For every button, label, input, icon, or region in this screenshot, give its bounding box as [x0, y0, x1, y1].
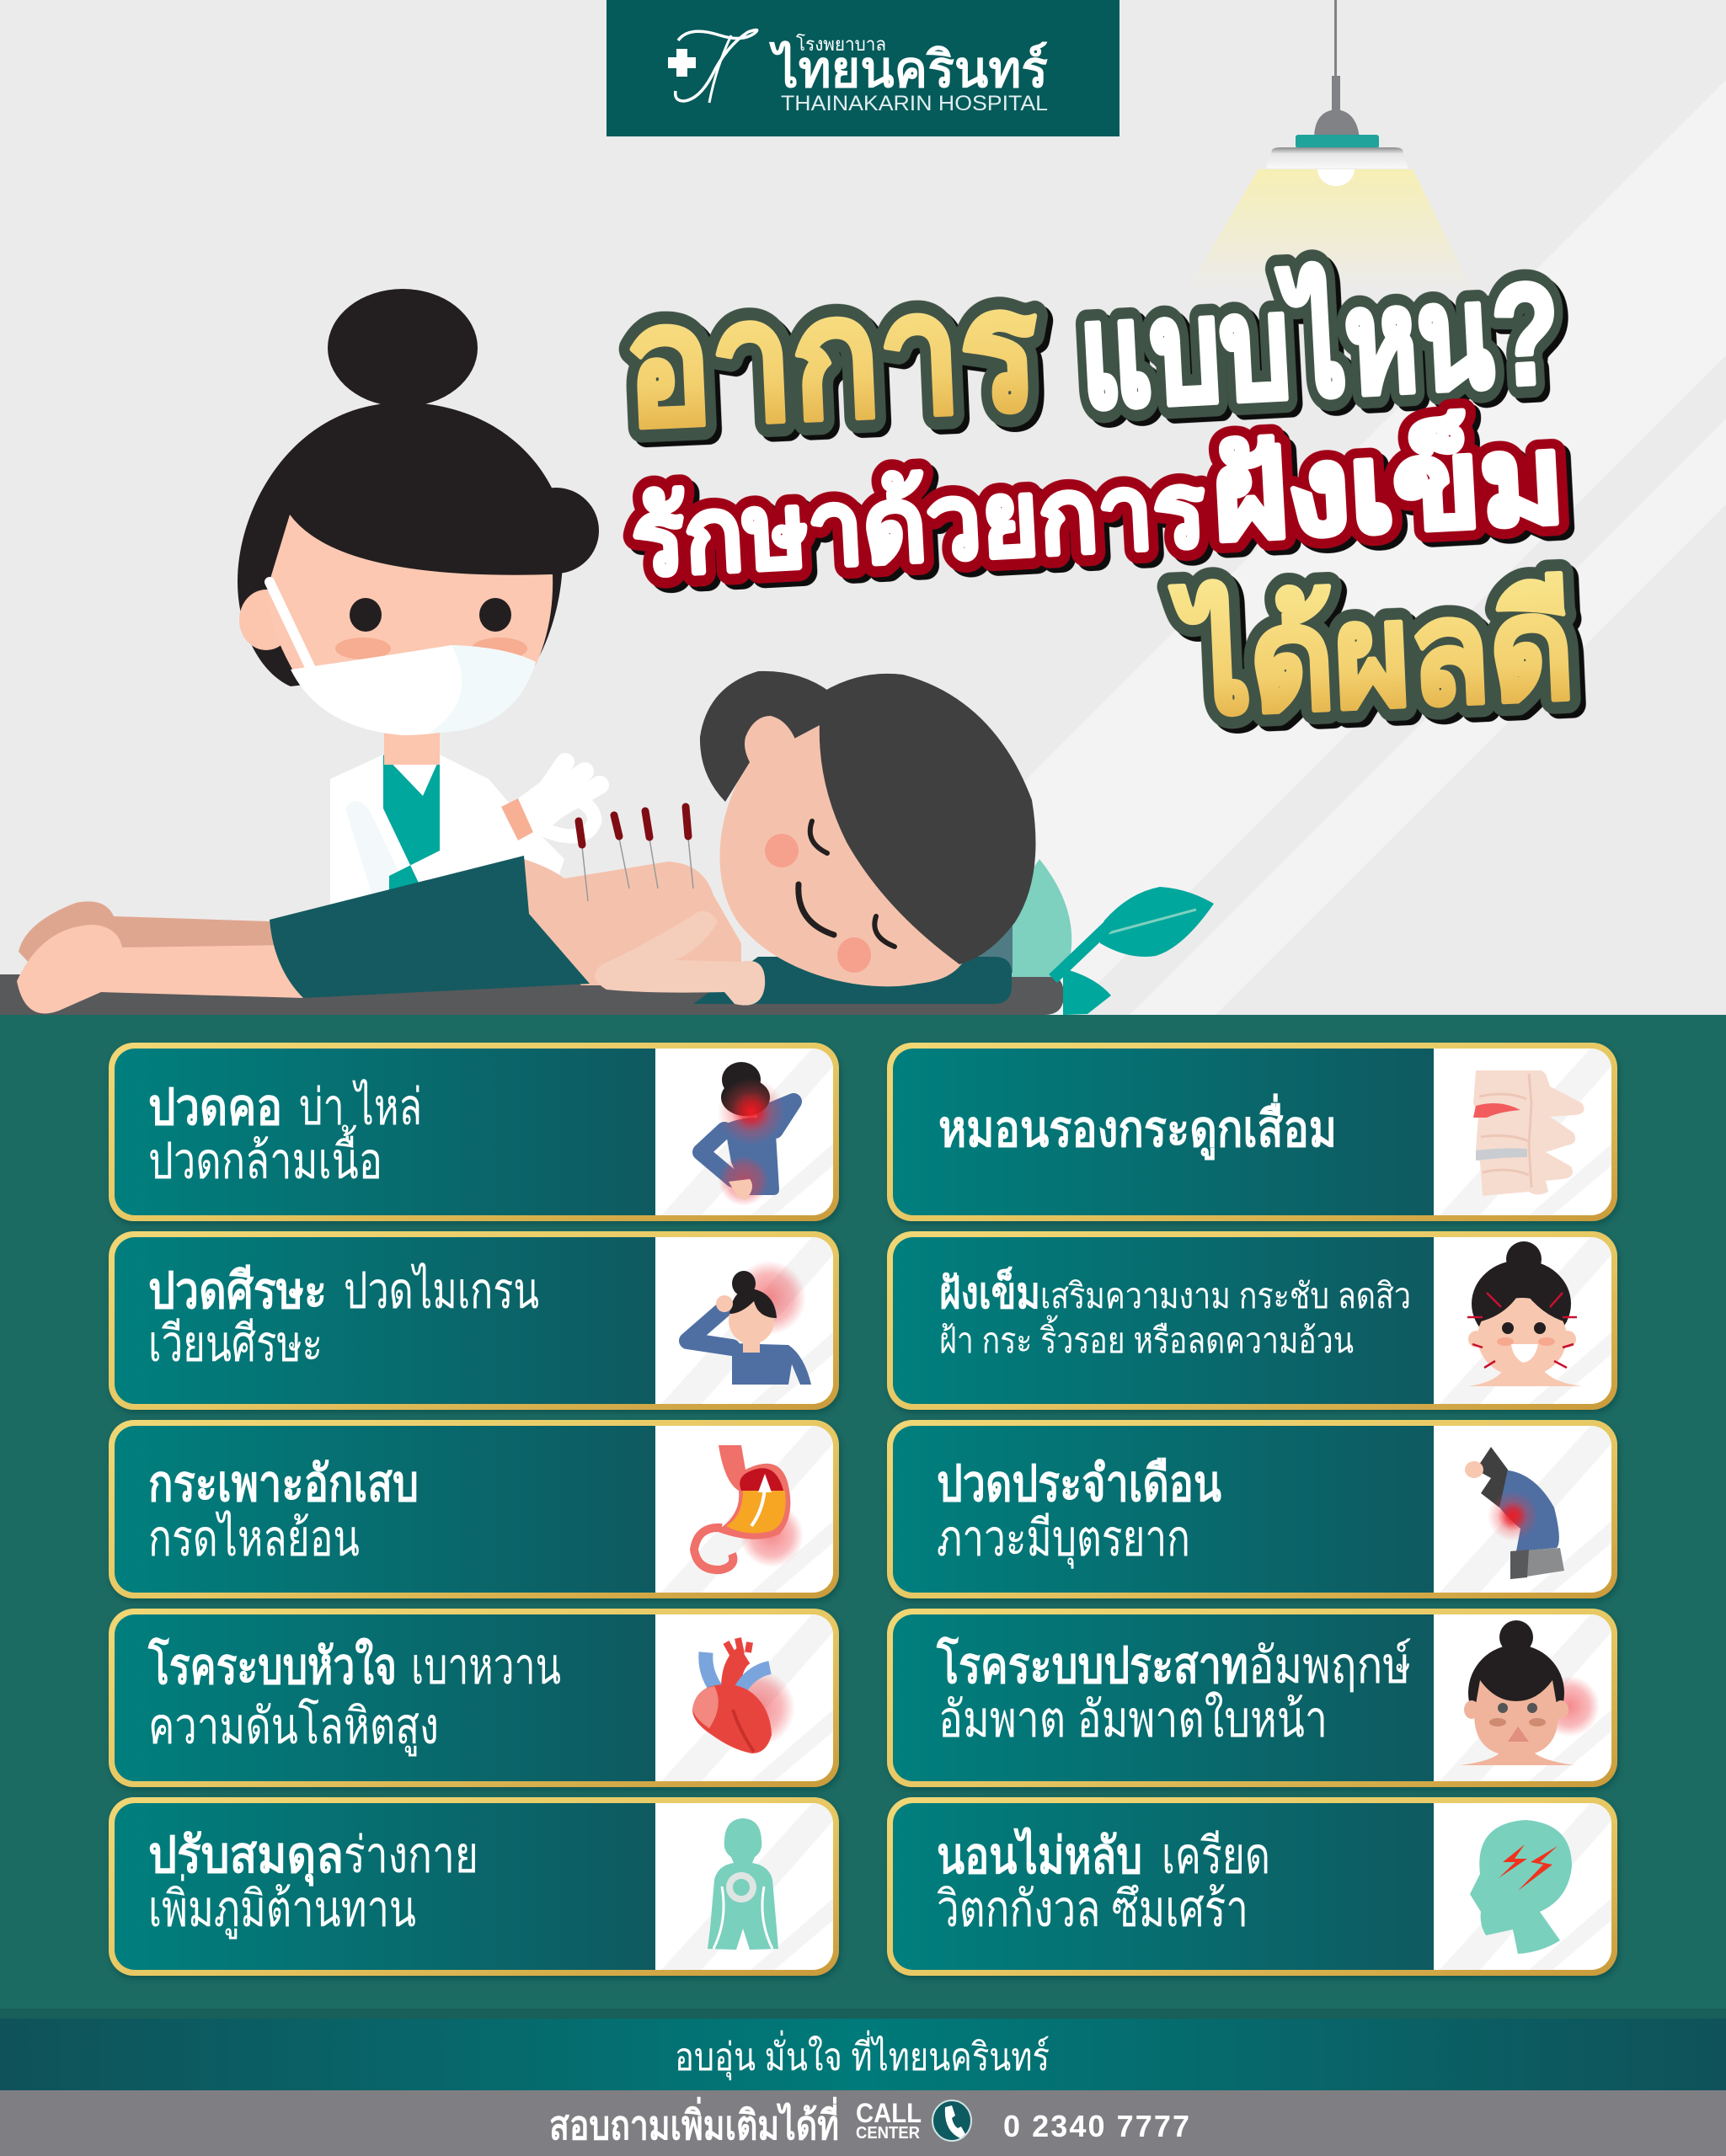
label second line: อัมพาต อัมพาตใบหน้า: [938, 1691, 1328, 1748]
label second line: เพิ่มภูมิต้านทาน: [148, 1874, 416, 1940]
card: heart disease: [109, 1609, 839, 1787]
icon: smiling face with needles: [1467, 1241, 1582, 1386]
card: menstrual pain: [887, 1420, 1617, 1598]
patient face: [720, 724, 965, 986]
nurse cheeks: [335, 638, 527, 659]
label bold: โรคระบบประสาท: [936, 1636, 1248, 1694]
title word: white which kind: แบบไหน?: [1076, 250, 1563, 438]
background wall: [0, 0, 1726, 1019]
nurse scrubs: [383, 755, 440, 914]
patient ear: [745, 716, 796, 775]
icon: phone: [932, 2100, 971, 2141]
label bold: ปรับสมดุล: [148, 1827, 344, 1886]
nurse hair: [238, 403, 563, 686]
logo big Thai name: ไทยนครินทร์: [768, 40, 1048, 98]
logo English name: THAINAKARIN HOSPITAL: [781, 92, 1048, 115]
card: herniated disc: [887, 1043, 1617, 1221]
label second line: ความดันโลหิตสูง: [148, 1697, 439, 1757]
label bold: กระเพาะอักเสบ: [148, 1455, 419, 1512]
patient back: [518, 857, 741, 985]
label regular: เครียด: [1162, 1828, 1270, 1884]
icon: heart: [692, 1638, 795, 1753]
icon: abdominal pain figure: [1465, 1447, 1564, 1579]
title word: acupuncture: ฝังเข็ม: [1209, 405, 1568, 565]
nurse eyes: [350, 598, 511, 632]
slogan text: อบอุ่น มั่นใจ ที่ไทยนครินทร์: [675, 2030, 1050, 2081]
nurse face mask: [291, 645, 536, 735]
logo cross mark: [668, 29, 757, 103]
label regular: บ่า ไหล่: [299, 1078, 422, 1135]
icon: stomach: [694, 1445, 804, 1570]
hospital logo panel: [607, 0, 1119, 136]
label bold: ปวดประจำเดือน: [937, 1455, 1221, 1512]
footer contact bar: CENTER: [856, 2124, 921, 2143]
teal list section: [0, 1015, 1726, 2019]
label second line: กรดไหลย้อน: [148, 1509, 360, 1566]
card: balance body: [109, 1797, 839, 1976]
nurse coat: [330, 755, 564, 910]
label regular: ร่างกาย: [344, 1827, 478, 1883]
icon: woman silhouette: [708, 1818, 778, 1950]
title word: gold symptom: อาการ: [621, 256, 1041, 462]
label second line: ฝ้า กระ ริ้วรอย หรือลดความอ้วน: [939, 1315, 1354, 1360]
label bold: ฝังเข็ม: [939, 1267, 1040, 1318]
head pillow: [960, 922, 1013, 973]
logo small Thai name: โรงพยาบาล: [796, 34, 886, 55]
label regular: อัมพฤกษ์: [1248, 1637, 1411, 1694]
label second line: เวียนศีรษะ: [148, 1315, 323, 1372]
title heading: [621, 250, 1577, 745]
icon: spine: [1473, 1070, 1584, 1196]
phone number: 0 2340 7777: [1003, 2109, 1189, 2143]
label second line: วิตกกังวล ซึมเศร้า: [937, 1881, 1248, 1937]
title word: treated with: รักษาด้วยการ: [628, 451, 1208, 598]
title word: acupuncture: ฝังเข็ม: [1209, 405, 1568, 565]
card: headache: [109, 1231, 839, 1410]
card: cosmetic acupuncture: [887, 1231, 1617, 1410]
call center label: CALL: [856, 2098, 922, 2128]
icon: neck pain person: [701, 1062, 794, 1206]
patient hair back lump: [700, 671, 831, 802]
nurse neck: [384, 724, 440, 765]
label second line: ภาวะมีบุตรยาก: [937, 1510, 1190, 1569]
label regular: เสริมความงาม กระชับ ลดสิว: [1040, 1276, 1411, 1315]
icon: headache person: [687, 1261, 811, 1385]
leaf back: [1009, 859, 1071, 977]
illustration: patient on table: [0, 671, 1214, 1015]
nurse bun: [328, 289, 478, 407]
patient hair main: [820, 674, 1036, 964]
card: insomnia stress: [887, 1797, 1617, 1976]
light diagonal stripes on the wall: [791, 80, 1726, 1015]
card: gastritis: [109, 1420, 839, 1598]
title word: treated with: รักษาด้วยการ: [628, 451, 1208, 598]
title word: white which kind: แบบไหน?: [1076, 250, 1563, 438]
footer slogan band: [0, 2009, 1726, 2090]
nurse ear: [239, 590, 293, 650]
label regular: ปวดไมเกรน: [344, 1262, 539, 1319]
patient skirt: [270, 856, 590, 998]
footer contact bar: [0, 2090, 1726, 2156]
ceiling lamp: [1187, 0, 1472, 290]
illustration: nurse: [238, 289, 600, 918]
label bold: นอนไม่หลับ: [937, 1826, 1142, 1884]
label second line: ปวดกล้ามเนื้อ: [148, 1124, 382, 1189]
label regular: เบาหวาน: [411, 1638, 561, 1694]
back leg: [19, 901, 278, 977]
title word: gives good results: ได้ผลดี: [1170, 565, 1577, 745]
leaves teal: [1053, 887, 1214, 1015]
icon: head with lightning: [1470, 1820, 1572, 1954]
label bold: ปวดศีรษะ: [148, 1262, 327, 1319]
card: paralysis: [887, 1609, 1617, 1787]
card: neck shoulder pain: [109, 1043, 839, 1221]
treatment table: [0, 974, 1064, 1015]
nurse face: [268, 515, 553, 674]
title word: gives good results: ได้ผลดี: [1170, 565, 1577, 745]
label bold: โรคระบบหัวใจ: [147, 1636, 397, 1694]
contact prompt: สอบถามเพิ่มเติมได้ที่: [549, 2096, 839, 2148]
title word: gold symptom: อาการ: [621, 256, 1041, 462]
acupuncture needles: [579, 807, 693, 901]
icon: facial palsy face: [1461, 1620, 1600, 1765]
nurse gloved hand: [501, 762, 600, 841]
label bold: ปวดคอ: [148, 1079, 282, 1135]
label bold: หมอนรองกระดูกเสื่อม: [938, 1093, 1337, 1161]
patient cheeks: [765, 834, 871, 973]
patient arm: [595, 911, 765, 1006]
patient closed eyes and smile: [799, 821, 895, 947]
front leg and foot: [17, 925, 303, 1013]
